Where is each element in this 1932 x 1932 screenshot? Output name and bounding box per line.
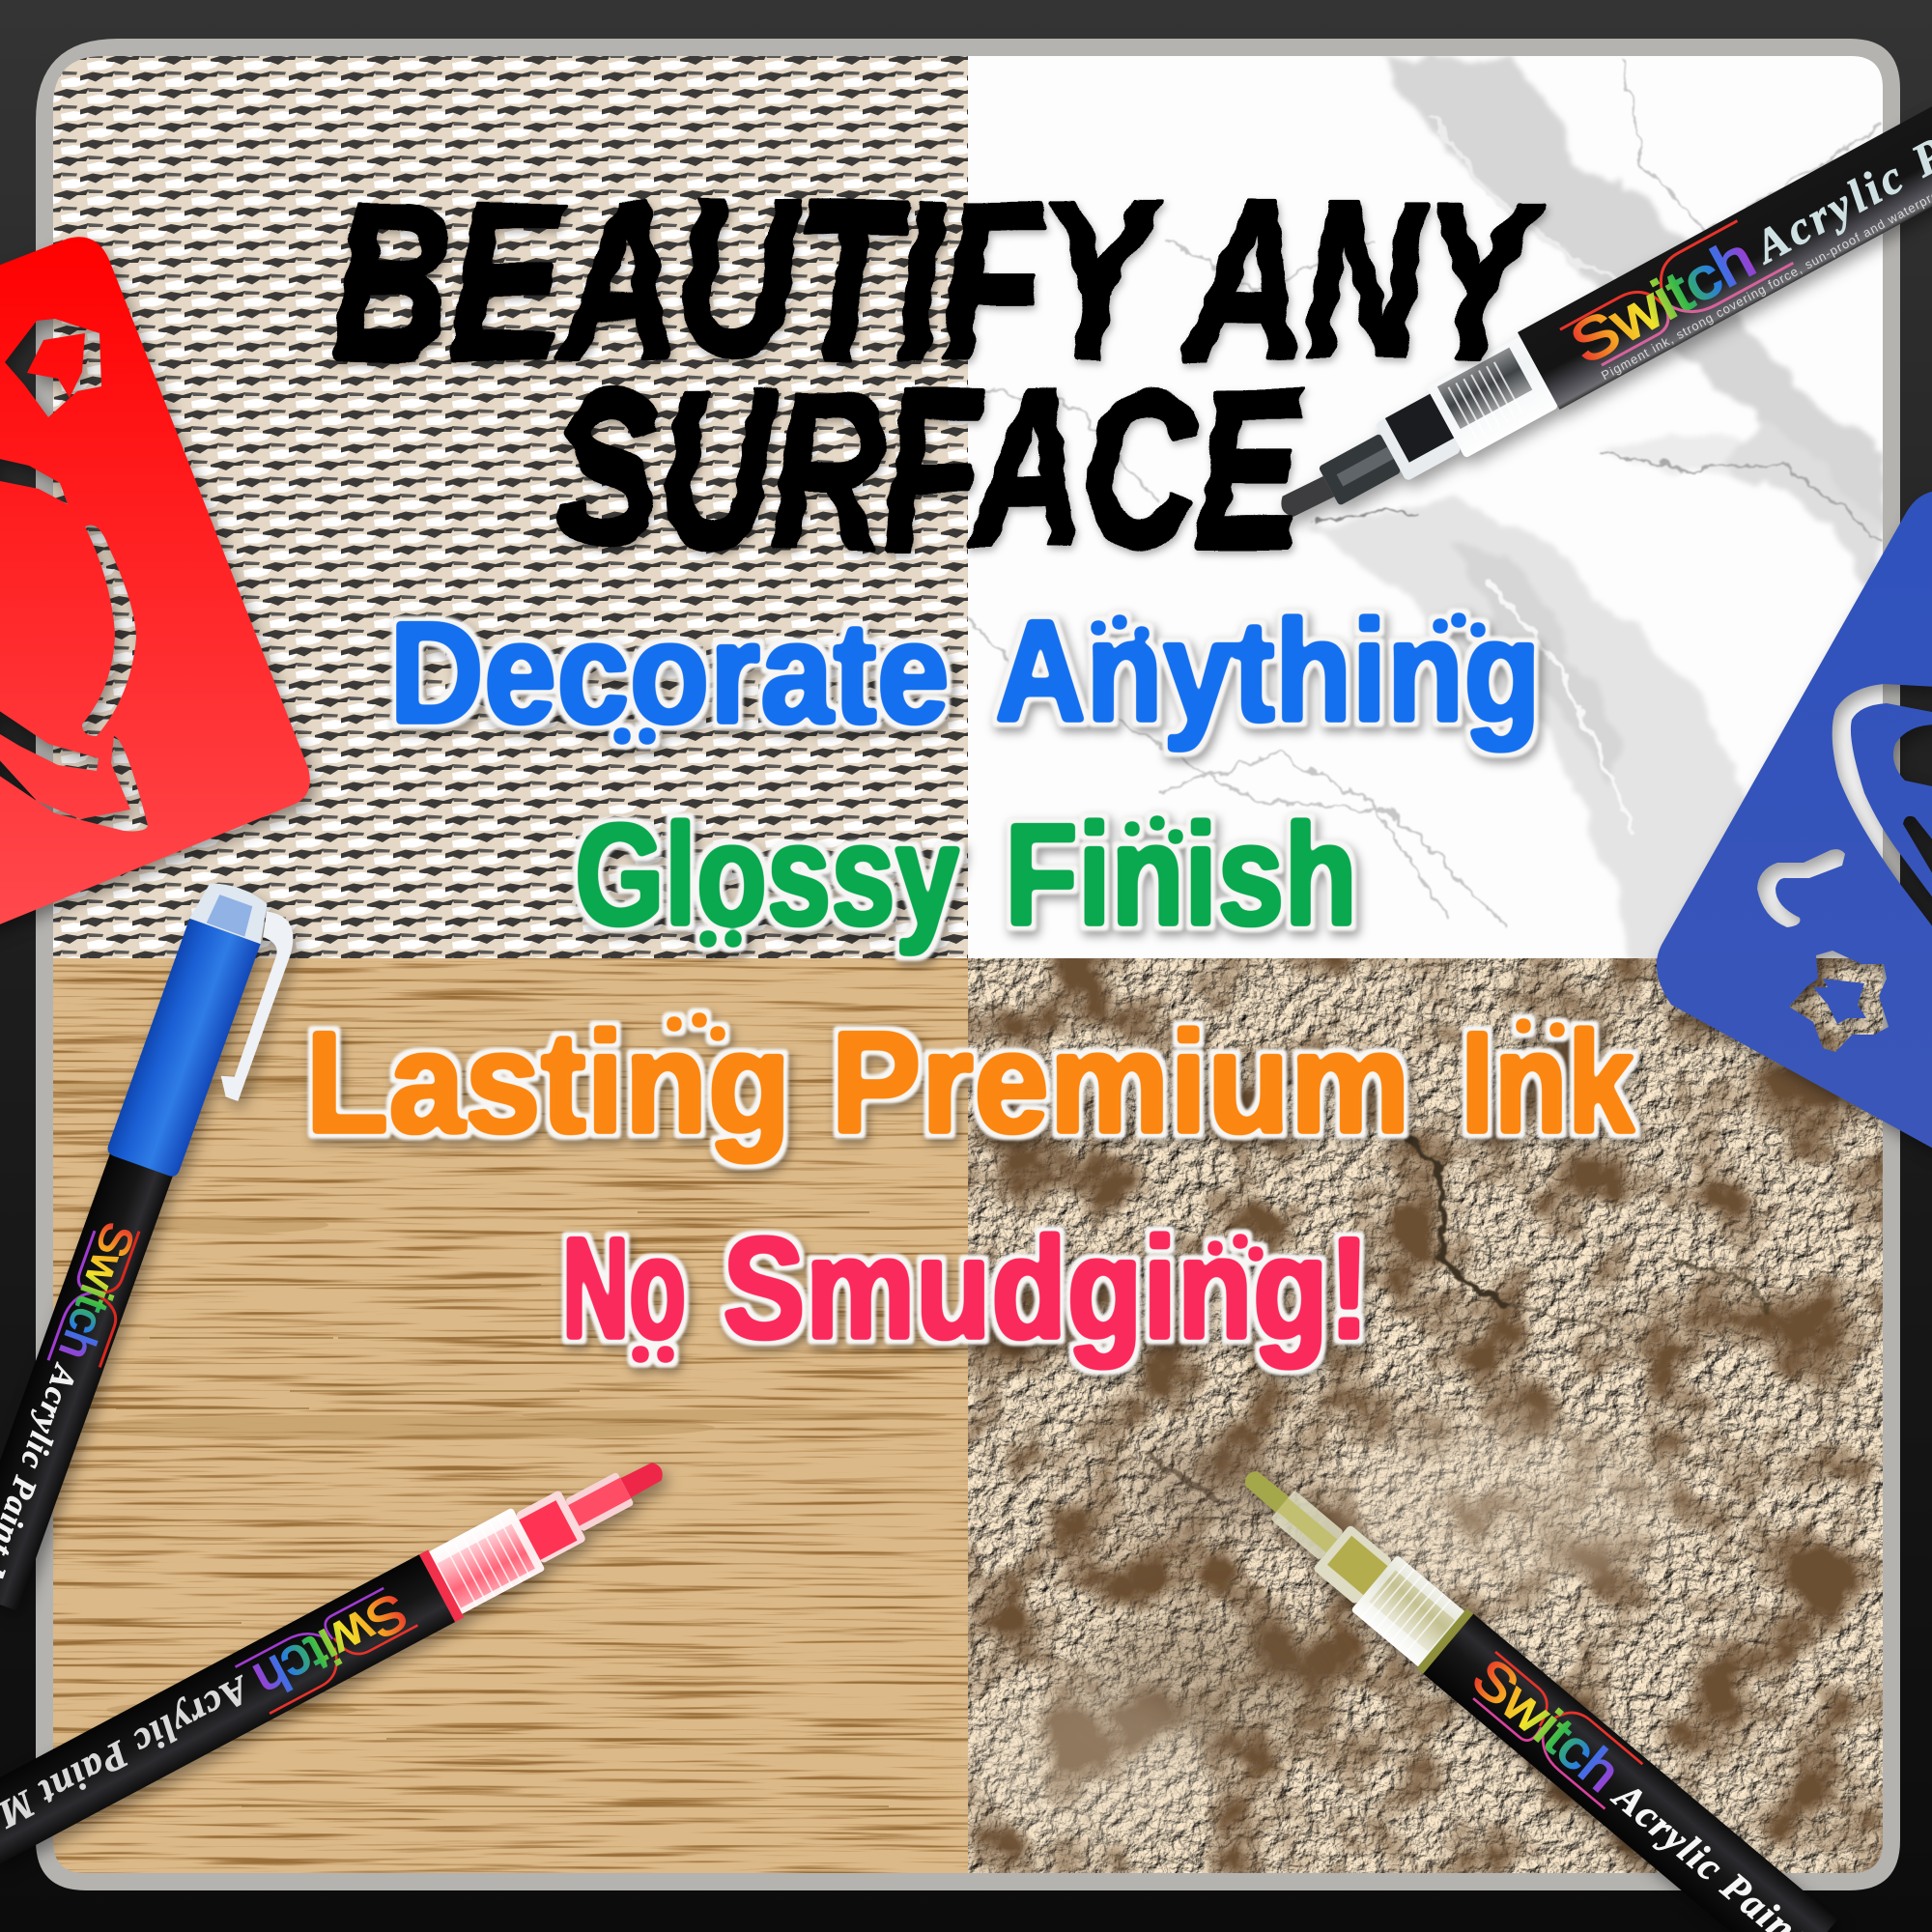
pen: gold marker bottom right: Switch (1462, 1646, 1632, 1803)
panel: rough stone texture (968, 958, 1883, 1873)
pen: gold marker bottom right (1222, 1445, 1837, 1932)
pen: blue capped marker left (0, 876, 306, 1623)
text line: Lasting Premium Ink (305, 1001, 1634, 1163)
pen: black marker top right (1262, 99, 1932, 549)
title: BEAUTIFY ANY (333, 156, 1544, 406)
text line: Decorate Anything: Anything (995, 589, 1541, 752)
text line: Glossy Finish: Glossy (575, 793, 959, 955)
title (333, 156, 1544, 594)
pen: blue capped marker left: Switch (49, 1216, 145, 1366)
text line: Glossy Finish (575, 793, 1357, 955)
text line: No Smudging!: Smudging! (723, 1207, 1370, 1369)
panel: light wood texture (48, 958, 968, 1873)
text line: No Smudging!: No (562, 1207, 686, 1369)
red stencil (0, 237, 310, 932)
pen: red marker bottom left (0, 1435, 679, 1871)
panel: woven fabric texture (53, 56, 968, 958)
text line: Glossy Finish: Finish (1005, 793, 1357, 955)
blue stencil (1657, 491, 1932, 1151)
text line: Decorate Anything (389, 589, 1541, 753)
panel: white marble texture (968, 56, 1883, 966)
pen: red marker bottom left: Switch (245, 1581, 417, 1710)
title: SURFACE (555, 344, 1303, 594)
text line: Lasting Premium Ink: Lasting (305, 1001, 791, 1163)
text line: Decorate Anything: Decorate (389, 591, 950, 753)
text line: Lasting Premium Ink: Premium (831, 1001, 1410, 1163)
text line: Lasting Premium Ink: Ink (1461, 1001, 1634, 1163)
pen: black marker top right: Switch (1560, 225, 1765, 377)
